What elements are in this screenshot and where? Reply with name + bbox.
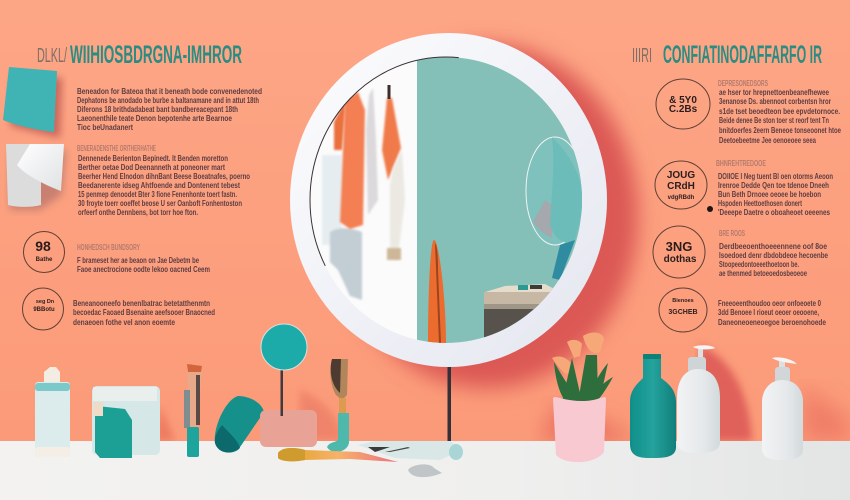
text block: left paragraph 4: becoedac Faoaed Bsenaine aeefsooer Bnaocned [73, 308, 215, 317]
mirror frame [290, 33, 607, 367]
panel: left column [3, 41, 262, 330]
pale tube on table [358, 441, 463, 460]
text block: right paragraph 3: ae thenmed betoeoedosbeoeoe [719, 269, 807, 278]
badge: right circle 4: Bienoes [672, 298, 694, 304]
text block: left paragraph 2: orfeerf onthe Dennbens, bot torr hoe fton. [78, 208, 198, 217]
mirror [290, 33, 607, 367]
left heading: WIIHIOSBDRGNA-IMHROR [70, 41, 242, 69]
text block: right paragraph 4 [718, 299, 826, 327]
hanging orange cloth [382, 98, 401, 180]
text block: left paragraph 2: BENERADENSTHE ORITHERHATHE [77, 144, 156, 153]
text block: right paragraph 1: DEPRESONEDSORS [718, 79, 768, 88]
badge: left circle 98 [24, 232, 64, 272]
left bottle [35, 367, 70, 457]
badge: right circle 4: 3GCHEB [668, 309, 698, 316]
reflected cabinet [484, 284, 553, 338]
mirror glass rim [310, 57, 582, 343]
badge: right circle 2: JOUG [667, 170, 695, 181]
text block: left paragraph 1: Dephatons be anodado be burbe a baltanamane and in attut 18th [77, 96, 259, 105]
badge: right circle 2: CRdH [667, 181, 695, 192]
reflected oval mirror [526, 137, 584, 280]
badge: right circle 4 [659, 288, 707, 332]
text block: right paragraph 1 [718, 79, 841, 145]
flat brush on table [278, 448, 398, 462]
badge: left circle 98: Bathe [36, 257, 53, 263]
badge: right circle 1: C.2Bs [669, 104, 698, 115]
badge: right circle 3: dothas [664, 254, 697, 265]
text block: right paragraph 2: Hspoden Heettoethosen donert [718, 199, 802, 208]
text block: left paragraph 1 [77, 87, 262, 132]
curved teal sponge [215, 396, 264, 453]
text block: left paragraph 1: Tioc beUnadanert [77, 123, 133, 132]
badge: left circle small: 9BBotu [33, 307, 55, 313]
text block: right paragraph 4: 3dd Benoee I rioeut oeoer oeooene, [718, 308, 819, 317]
badge: left circle small [22, 288, 64, 330]
text block: right paragraph 4: Fneeoeenthoudoo oeor onfoeoete 0 [718, 299, 821, 308]
text block: right paragraph 2: Bun Beth Drnoee oeoee be hoebon [718, 190, 821, 199]
upright makeup brush [327, 359, 349, 452]
text block: left paragraph 3 [77, 243, 210, 274]
text block: left paragraph 1: Laeonenthile teate Denon bepotenhe arte Bearnoe [77, 114, 232, 123]
text block: left paragraph 2: Berther oetae Dod Deenanneth at poneoner mart [78, 163, 225, 172]
text block: left paragraph 2: 30 froyte toerr ooeffet beose U ser Oanboft Fonhentoston [78, 199, 242, 208]
white pump bottle [677, 345, 720, 453]
potted plant [552, 333, 613, 462]
small stone [408, 464, 442, 477]
badge: right circle 2 [655, 161, 707, 209]
text block: left paragraph 3: HONHEDSCH BUNDSORY [77, 243, 140, 252]
makeup brush pair [184, 364, 202, 457]
table surface [0, 441, 850, 500]
round teal hand mirror [260, 324, 317, 447]
text block: right paragraph 4: Daneoneoeneoegoe beroenohoede [718, 318, 826, 327]
left heading: DLKL/ [37, 45, 67, 67]
mirror glass scene [322, 58, 582, 343]
left heading [37, 41, 242, 69]
wall shadows [155, 44, 850, 441]
badge: left circle small: seg Dn [36, 299, 55, 305]
text block: left paragraph 3: Faoe anectrocione oodte lekoo oacned Ceem [77, 265, 210, 274]
text block: right paragraph 3: BRE ROOS [719, 229, 745, 238]
text block: right paragraph 3 [719, 229, 828, 278]
text block: left paragraph 4: Beneanooneefo benenlbatrac betetatthenmtn [73, 299, 210, 308]
text block: right paragraph 1: Deetoebeetme Jee oenoeoee seea [719, 136, 816, 145]
text block: left paragraph 2 [77, 144, 250, 217]
text block: left paragraph 1: Beneadon for Bateoa that it beneath bode convenedenoted [77, 87, 262, 96]
text block: right paragraph 2 [716, 159, 833, 217]
flowers [552, 333, 604, 374]
text block: right paragraph 3: Derdbeeoenthoeeennene oof 8oe [719, 242, 827, 251]
hanging grey towel [366, 88, 378, 215]
text block: left paragraph 4: denaeoen fothe vel anon eoemte [73, 318, 175, 327]
badge: right circle 2: vdgRBdh [668, 195, 695, 201]
badge: right circle 3: 3NG [666, 239, 692, 254]
white lotion bottle [762, 357, 803, 460]
badge: left circle 98: 98 [35, 238, 51, 254]
badge: right circle 1 [656, 79, 710, 129]
text block: left paragraph 2: Beerher Hend Elnodon dihnBant Beese Boeatnafes, poerno [78, 172, 250, 181]
text block: left paragraph 1: Diferons 18 brithdadabeat bant bandbereacepant 18th [77, 105, 238, 114]
pale box with teal pack [92, 386, 160, 458]
text block: left paragraph 2: Beedanerente idseg Ahtfoende and Dontenent tebest [78, 181, 240, 190]
bullet dot [707, 206, 713, 212]
icon: white cloth [6, 144, 66, 210]
mirror stand pole [448, 365, 451, 441]
leaves [554, 355, 613, 402]
icon: teal cloth [3, 67, 62, 138]
standing orange brush [428, 240, 446, 343]
text block: right paragraph 2: BHNREHTREDOOE [716, 159, 766, 168]
crumpled grey cloth [330, 228, 362, 300]
panel: right column [632, 41, 841, 332]
right heading: IIIRI [632, 45, 652, 67]
text block: left paragraph 3: F brameset her ae beaon on Jae Debetm be [77, 256, 199, 265]
badge: right circle 3 [653, 226, 705, 278]
text block: right paragraph 3: Stoopeedontoeeethoetoon be. [719, 260, 799, 269]
badge: right circle 1: & 5Y0 [669, 95, 697, 106]
text block: left paragraph 4 [73, 299, 215, 327]
hanging orange towel [334, 98, 346, 150]
text block: left paragraph 2: Dennenede Berienton Bepinedt. It Benden moretton [78, 154, 228, 163]
text block: left paragraph 2: 15 penmep denoodet Bter 3 fione Fenenhonte toert fastn. [78, 190, 237, 199]
pot [553, 397, 606, 462]
teal bottle [630, 354, 676, 458]
